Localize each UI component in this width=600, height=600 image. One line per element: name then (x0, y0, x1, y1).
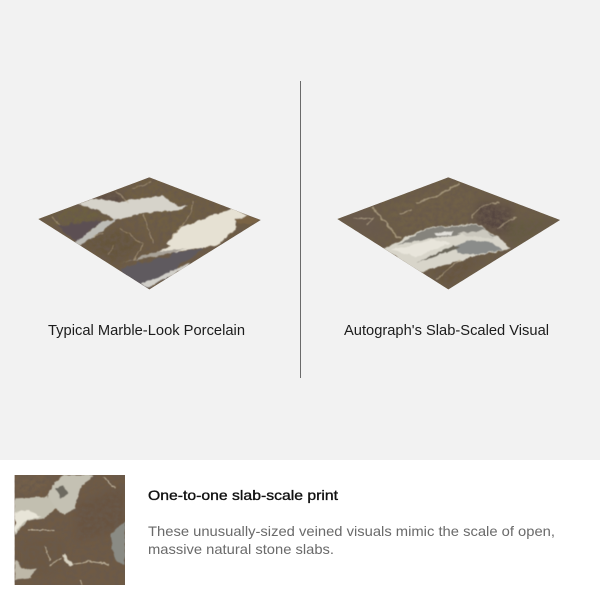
left marble tile: typical porcelain (33, 175, 267, 292)
right marble tile: autograph slab-scaled (333, 175, 567, 292)
center divider (300, 81, 301, 378)
footer body text (148, 523, 555, 557)
comparison panel background (0, 0, 600, 460)
footer body text: massive natural stone slabs. (148, 541, 334, 557)
footer body text: These unusually-sized veined visuals mimic the scale of open, (148, 523, 555, 539)
label: typical porcelain: Typical Marble-Look Porcelain (48, 323, 245, 339)
footer heading: One-to-one slab-scale print (148, 487, 338, 503)
footer panel background (0, 460, 600, 600)
label: autograph visual: Autograph's Slab-Scaled Visual (344, 323, 549, 339)
marble swatch thumbnail (15, 475, 125, 585)
